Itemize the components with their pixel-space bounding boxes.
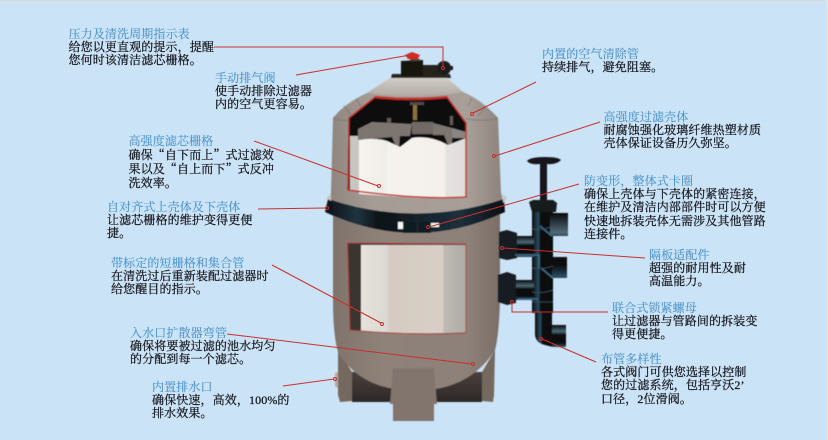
body text: 高温能力。 (649, 274, 710, 288)
body text: 在清洗过后重新装配过滤器时 (111, 269, 269, 283)
body text: 捷。 (107, 226, 131, 240)
upper cutaway window (348, 97, 466, 198)
body text (601, 365, 746, 406)
interior top gray (412, 122, 433, 134)
pipe collar (529, 200, 557, 212)
body text: 使手动排除过滤器 (215, 84, 312, 98)
body text: 得更便捷。 (612, 327, 673, 341)
heading: 内置排水口 (152, 380, 213, 394)
leader: drain (283, 378, 336, 386)
leader: short grids (272, 265, 384, 326)
heading: 带标定的短栅格和集合管 (111, 256, 244, 270)
callout: filter shell (604, 110, 761, 150)
body text: 口径，2位滑阀。 (601, 392, 692, 406)
body text: 果以及“自上而下”式反冲 (128, 160, 274, 177)
callout: drain (152, 380, 290, 420)
callout: union nut (612, 300, 758, 341)
body text: 在维护及清洁内部部件时可以方便 (584, 200, 766, 214)
body text: 让滤芯栅格的维护变得更便 (107, 213, 252, 227)
heading: 高强度过滤壳体 (604, 110, 688, 124)
leader: self aligning shell (258, 206, 328, 210)
white filter element (359, 137, 466, 198)
leader: clamp (426, 184, 579, 228)
elbow (535, 312, 553, 347)
heading: 高强度滤芯栅格 (128, 134, 213, 148)
callout: short grids (111, 256, 269, 296)
body text: 的分配到每一个滤芯。 (130, 352, 251, 366)
body text: 给您醒目的指示。 (111, 282, 208, 296)
filter tank (325, 52, 507, 421)
leader: air scavenger pipe (470, 82, 536, 116)
lower shell (333, 205, 500, 391)
body text: 洗效率。 (128, 176, 177, 190)
body text: 快速地拆装壳体无需涉及其他管路 (584, 214, 766, 228)
top valve (391, 52, 453, 78)
body text: 持续排气，避免阻塞。 (542, 60, 663, 74)
leader: inlet diffuser (227, 334, 474, 366)
body text (612, 314, 758, 341)
leader: union nut (510, 300, 608, 312)
heading: 压力及清洗周期指示表 (68, 26, 190, 40)
leader: filter grid (254, 141, 380, 188)
body text (215, 84, 312, 111)
body text (128, 146, 274, 190)
callout: air scavenger pipe (542, 46, 663, 74)
heading: 防变形，整体式卡圈 (584, 174, 693, 188)
body text: 壳体保证设备历久弥坚。 (604, 136, 737, 150)
filter top grid (358, 122, 412, 147)
body text: 各式阀门可供您选择以控制 (601, 365, 746, 379)
heading: 入水口扩散器弯管 (130, 326, 227, 340)
body text: 耐腐蚀强化玻璃纤维热塑材质 (604, 123, 761, 137)
body text (584, 187, 766, 241)
upper union (499, 230, 517, 260)
heading: 手动排气阀 (215, 70, 276, 84)
lower cutaway window (348, 243, 466, 334)
leader: filter shell (492, 122, 600, 158)
main pipe (532, 210, 553, 313)
callout: manual air vent (215, 70, 312, 111)
callout: self aligning shell (107, 200, 252, 240)
leader: manual air vent (296, 54, 412, 75)
body text: 超强的耐用性及耐 (649, 261, 746, 275)
upper shell (330, 78, 502, 214)
pipe highlights (515, 226, 553, 299)
heading: 布管多样性 (601, 352, 662, 366)
callout: bulkhead fitting (649, 248, 746, 288)
center foot (390, 368, 437, 421)
body text (152, 393, 290, 420)
callout: inlet diffuser (130, 326, 275, 366)
body text (68, 40, 214, 67)
leader: pressure gauge (214, 47, 444, 70)
body text: 内的空气更容易。 (215, 97, 312, 111)
body text: 让过滤器与管路间的拆装变 (612, 314, 757, 328)
body text (111, 269, 269, 296)
leader lines (214, 47, 645, 386)
body text (604, 123, 761, 150)
body text: 连接件。 (584, 227, 632, 241)
plumbing manifold (498, 157, 568, 347)
heading: 联合式锁紧螺母 (612, 300, 697, 314)
body text: 确保快速，高效，100%的 (152, 393, 290, 407)
clamp band (325, 194, 507, 233)
body text: 您何时该清洁滤芯栅格。 (68, 53, 202, 67)
handle (527, 157, 561, 202)
heading: 隔板适配件 (649, 248, 710, 262)
base legs (335, 350, 495, 402)
callout: pressure gauge (68, 26, 214, 67)
body text (107, 213, 252, 240)
body text: 您的过滤系统，包括亨沃2’ (601, 378, 745, 392)
dome ribs (333, 98, 498, 121)
body text: 排水效果。 (152, 406, 213, 420)
dome cap (367, 75, 463, 96)
body text: 给您以更直观的提示，提醒 (68, 40, 214, 54)
body text: 确保将要被过滤的池水均匀 (130, 339, 275, 353)
heading: 内置的空气清除管 (542, 46, 639, 60)
pipe rib lines (532, 226, 553, 302)
leader: plumbing versatility (540, 338, 596, 362)
body text: 确保“自下而上”式过滤效 (128, 146, 274, 163)
leader: bulkhead fitting (500, 246, 645, 258)
right stubs (550, 213, 568, 278)
heading: 自对齐式上壳体及下壳体 (107, 200, 240, 214)
callout: filter grid (128, 134, 274, 190)
body text (649, 261, 746, 288)
lower union (498, 272, 516, 305)
callout: clamp (584, 174, 766, 241)
body text: 确保上壳体与下壳体的紧密连接， (584, 187, 766, 201)
body text (130, 339, 275, 366)
callout: plumbing versatility (601, 352, 746, 406)
